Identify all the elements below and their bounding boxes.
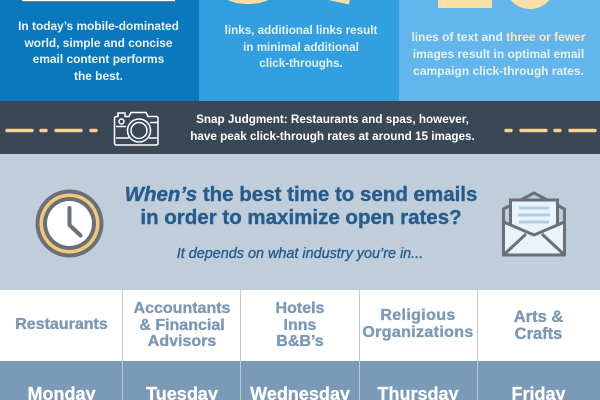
text: snap judgment: have peak click-through rates at around 15 images. (190, 130, 475, 142)
text: lines of text (411, 30, 586, 78)
banner: snap judgment (0, 101, 600, 154)
panel: mobile content (0, 0, 199, 101)
label: accountants: & Financial (139, 316, 225, 334)
text: mobile content: world, simple and concise (24, 36, 172, 50)
label: arts: Arts & (514, 308, 563, 326)
panel: when to send (0, 154, 600, 290)
text: snap judgment: Snap Judgment: Restaurants and spas, however, (196, 113, 469, 126)
text: links (225, 24, 378, 70)
label: accountants (134, 300, 230, 350)
table: industry labels (0, 290, 600, 361)
icon: open envelope (502, 192, 566, 256)
text: mobile content: the best. (74, 69, 123, 83)
text: snap judgment (190, 113, 475, 142)
icon: phone base (22, 0, 175, 2)
label: accountants: Advisors (148, 333, 216, 350)
icon: numeral one base (438, 0, 492, 8)
label: hotels: B&B’s (276, 333, 324, 350)
table: day row (0, 361, 600, 400)
label: restaurants: Restaurants (15, 316, 108, 333)
label: hotels (276, 300, 324, 350)
icon: numeral zero base (505, 0, 555, 9)
text: links: click-throughs. (259, 57, 343, 70)
icon: camera (114, 112, 159, 146)
label: religious (362, 307, 474, 341)
icon: yellow shape (325, 0, 351, 4)
icon: yellow ellipse (225, 0, 271, 4)
heading: when's the best time (125, 183, 477, 229)
dashes: left (5, 128, 98, 132)
dashes: right (504, 128, 597, 132)
label: religious: Organizations (362, 324, 474, 340)
label: arts (514, 308, 563, 342)
text: links: links, additional links result (225, 24, 377, 37)
text: mobile content: In today’s mobile-dominated (18, 19, 179, 33)
panel: lines of text (399, 0, 600, 101)
heading: when's the best time: When’s the best time to send emails (125, 183, 477, 206)
text: lines of text: campaign click-through rates. (413, 64, 584, 78)
label: religious: Religious (380, 307, 456, 324)
panel: links (199, 0, 399, 101)
text: lines of text: images result in optimal email (413, 47, 584, 61)
text: mobile content (18, 19, 179, 83)
subheading: It depends on what industry you’re in... (177, 246, 423, 262)
label: arts: Crafts (515, 324, 562, 342)
heading: when's the best time: in order to maximize open rates? (140, 206, 462, 229)
text: mobile content: email content performs (33, 52, 164, 66)
icon: clock (36, 190, 104, 258)
label: accountants: Accountants (134, 300, 230, 317)
label: hotels: Inns (284, 316, 316, 334)
text: links: in minimal additional (243, 41, 359, 54)
label: hotels: Hotels (276, 300, 324, 317)
text: lines of text: lines of text and three or fewer (411, 30, 586, 44)
